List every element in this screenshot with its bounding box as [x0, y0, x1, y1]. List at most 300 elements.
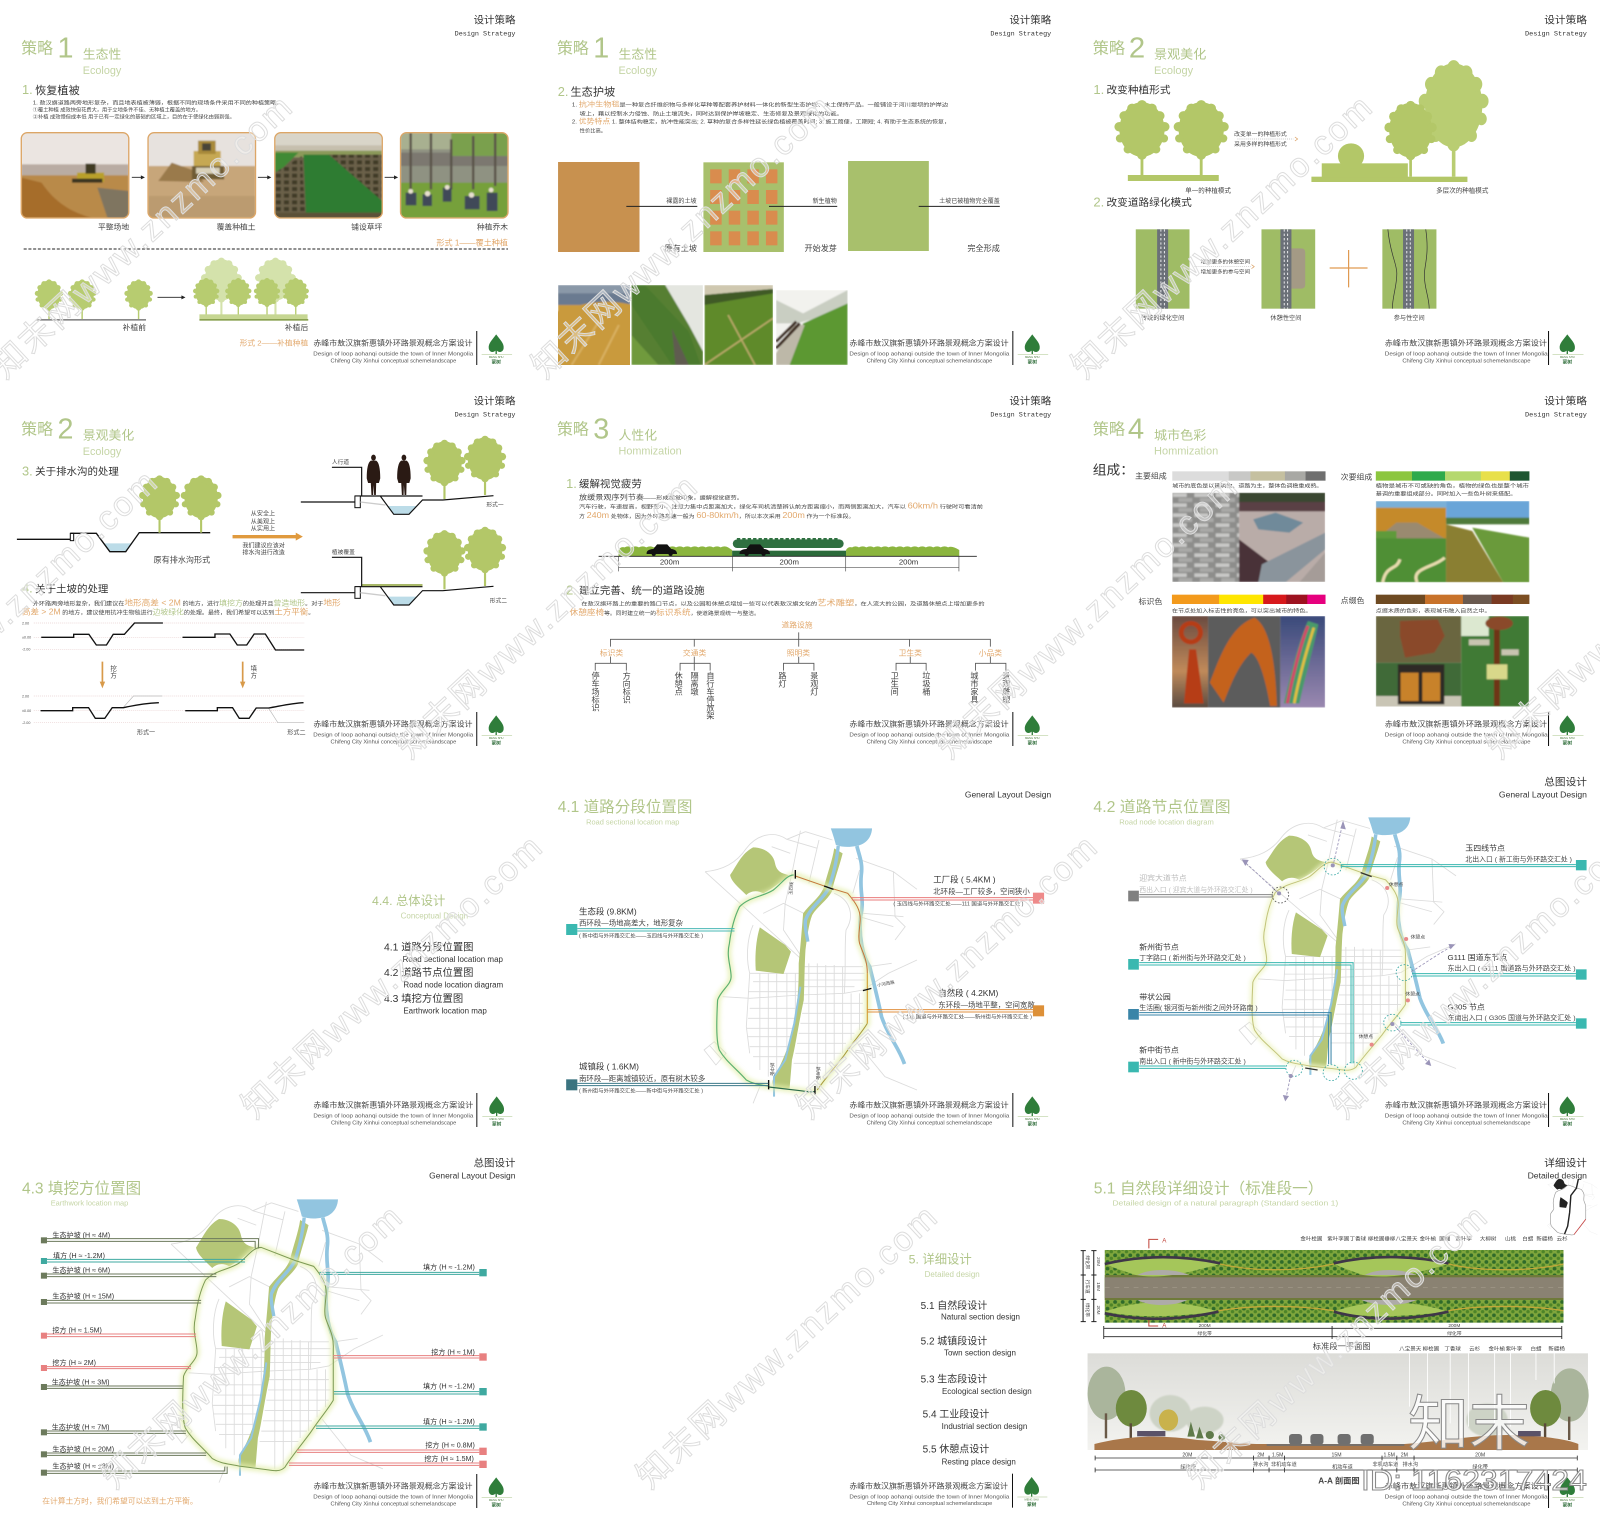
tree diagram: road facilities: 垃圾桶 [922, 671, 931, 697]
panel title [557, 414, 682, 458]
footer: MENG SHU [1025, 736, 1040, 740]
tree diagram: road facilities: 路灯 [778, 671, 787, 689]
section dimensions: 绿化带 [1472, 1464, 1488, 1471]
swatch labels: 开始发芽 [804, 243, 837, 253]
header label: 设计策略 [1009, 395, 1052, 408]
section markers A: A [1162, 1237, 1167, 1244]
map: ring road and nodes: 休憩点 [1359, 1033, 1373, 1040]
footer: Chifeng City Xinhui conceptual schemelandscape [867, 1120, 992, 1126]
tree diagram: road facilities: 照明类 [787, 647, 810, 657]
chart: earthwork profiles before: 2.00 [22, 621, 29, 625]
contents list: Earthwork location map [403, 1006, 487, 1015]
callouts: right nodes [1341, 843, 1587, 1029]
header label: General Layout Design [1499, 789, 1587, 799]
map: ring road segments: 新中街 [769, 1063, 776, 1076]
callouts: right nodes: 玉四线节点 [1465, 843, 1505, 853]
main colours: bar, caption, photo [1135, 470, 1326, 582]
header label: Design Strategy [455, 411, 515, 419]
map: ring road segments: 玉四线 [787, 881, 794, 895]
footer: Design of loop aohanqi outside the town of Inner Mongolia [313, 733, 473, 739]
section markers A [1149, 1237, 1167, 1329]
signage colours: bar, caption, photo: 在节点处加入标志性的亮色，可以突出城市的特色。 [1172, 606, 1311, 614]
callouts: right earthwork items [289, 1262, 487, 1468]
callouts: left earthwork items: 挖方 (H ≈ 2M) [52, 1358, 96, 1367]
footer: 赤峰市敖汉旗新惠镇外环路景观概念方案设计 [849, 1100, 1009, 1110]
callouts: right earthwork items: 挖方 (H ≈ 1.5M) [424, 1454, 474, 1463]
section heading: 恢复植被 [35, 83, 80, 97]
footer: 蒙树 [1027, 1501, 1037, 1508]
footer [1385, 331, 1583, 365]
contents list [384, 940, 504, 1015]
callouts: right nodes: 东南出入口 ( G305 国道与外环路交汇处 ) [1447, 1013, 1576, 1022]
photo: terraced green slope [704, 285, 773, 365]
footer: Design of loop aohanqi outside the town of Inner Mongolia [1385, 1114, 1548, 1120]
callouts: left earthwork items: 挖方 (H ≈ 1.5M) [52, 1326, 102, 1335]
panel title: 策略 [557, 420, 589, 438]
orange arrow with reasons: 我们建议应该对 [242, 541, 285, 549]
footer: MENG SHU [1025, 1117, 1040, 1121]
section heading 4 [22, 581, 109, 596]
road captions: 休憩性空间 [1270, 314, 1301, 322]
plant labels on section: 白蜡 [1530, 1345, 1542, 1353]
horizontal dimensions: 绿化带 [1197, 1330, 1212, 1337]
callouts: left earthwork items: 生态护坡 (H ≈ 7M) [52, 1422, 109, 1431]
plan caption: 标准段一平面图 [1313, 1341, 1371, 1351]
main colours: bar, caption, photo: 城市的底色是以建筑物、道路为主，整体色调稳重成熟。 [1172, 482, 1322, 490]
section dimensions: 2M [1401, 1453, 1408, 1459]
footer: Design of loop aohanqi outside the town of Inner Mongolia [313, 1114, 473, 1120]
footer: Design of loop aohanqi outside the town of Inner Mongolia [1385, 733, 1548, 739]
horizontal dimensions: 绿化带 [1447, 1330, 1462, 1337]
header label: 总图设计 [474, 1157, 515, 1170]
callout: factory section [852, 875, 1044, 908]
callouts: left earthwork items: 填方 (H ≈ -1.2M) [53, 1251, 105, 1260]
plant labels on plan: 大柳树 [1480, 1234, 1497, 1242]
diagram captions [123, 322, 309, 348]
header label: General Layout Design [965, 789, 1052, 799]
header label: Design Strategy [990, 411, 1051, 419]
callouts: left nodes: 新中街节点 [1139, 1044, 1179, 1054]
diagram captions [1185, 185, 1489, 194]
callouts: right earthwork items: 填方 (H ≈ -1.2M) [423, 1382, 475, 1391]
tree diagram: road facilities: 城市家具 [970, 672, 979, 705]
description text: 性价比高。 [580, 126, 606, 134]
intro text [33, 99, 282, 121]
road: traditional greening [1136, 229, 1189, 309]
section dimensions [1095, 1453, 1577, 1472]
section heading 1 [1093, 82, 1171, 97]
panel title: Hommization [1154, 446, 1218, 458]
section dimensions: 非机动车道 [1271, 1461, 1297, 1468]
footer [1385, 1474, 1583, 1508]
horizontal dimensions: 200M [1448, 1323, 1460, 1329]
panel title: Ecology [1154, 65, 1194, 77]
diagram captions: 补植后 [285, 322, 309, 332]
description text [570, 597, 985, 617]
arrow [158, 296, 185, 299]
footer: 赤峰市敖汉旗新惠镇外环路景观概念方案设计 [849, 1480, 1008, 1490]
section dimensions: 排水沟 [1403, 1461, 1418, 1468]
tree diagram: road facilities: 标识类 [600, 647, 623, 657]
plant labels on section: 八宝景天 [1399, 1345, 1422, 1353]
swatch labels: 裸露的土坡 [666, 197, 697, 205]
callouts: left earthwork items: 生态护坡 (H ≈ 3M) [52, 1377, 109, 1386]
description text: 汽车行驶，车速提高，视野变小，注意力集中点距离加大，绿化车司机清楚辨认前方距离缩小，而两侧距离加大，汽车以 60km/h 行驶时可看清前 [579, 502, 984, 511]
diagram captions: 补植前 [123, 322, 146, 332]
arrows: cut and fill: 方 [110, 670, 117, 679]
accent colours: bar, caption, photo: 点缀木质的色彩，表现城市融入自然之中。 [1376, 606, 1491, 614]
swatch labels: 土坡已被植物完全覆盖 [939, 197, 1000, 205]
footer [313, 1474, 512, 1508]
section heading: 2. [558, 84, 568, 99]
footer: Chifeng City Xinhui conceptual schemelandscape [331, 1120, 456, 1126]
description text: 2. 优势特点 1. 整体结构稳定，抗冲性能突出; 2. 草种的复合多样性延长绿色植被覆盖时间; 3. 施工简便，工期短; 4. 有助于生态系统的恢复， [572, 117, 950, 126]
footer: MENG SHU [1025, 355, 1040, 359]
header label: Design Strategy [1525, 30, 1587, 38]
panel: 5.1 natural section detailed design [1081, 1157, 1597, 1508]
plant labels on section: 金叶榆 [1488, 1345, 1506, 1353]
footer: Design of loop aohanqi outside the town of Inner Mongolia [849, 1494, 1009, 1500]
arrows: cut and fill: 挖 [110, 664, 117, 673]
horizontal dimensions: 200M [1199, 1323, 1211, 1329]
section heading 3: 关于排水沟的处理 [35, 465, 119, 478]
contents list: 5.1 自然段设计 [921, 1299, 987, 1312]
footer: MENG SHU [1560, 1117, 1575, 1121]
chart: earthwork profiles before [22, 621, 304, 652]
tree diagram: road facilities: 道路设施 [781, 620, 813, 630]
section caption: A-A 剖面图 [1318, 1475, 1360, 1485]
watermarks: diagonal site marks: 知末网www.znzmo.com [1180, 1199, 1494, 1496]
footer: Design of loop aohanqi outside the town of Inner Mongolia [313, 1495, 473, 1501]
panel title [1094, 1180, 1339, 1207]
chart: earthwork profiles after: ±0.00 [22, 709, 31, 713]
tree diagram: road facilities: 自行车停放架 [706, 671, 715, 721]
contents list: 4.3 填挖方位置图 [384, 992, 463, 1005]
orange arrow with reasons: 从美观上 [251, 517, 275, 525]
panel title [557, 33, 658, 77]
panel title: 生态性 [619, 47, 657, 62]
section dimensions: 1.5M [1272, 1453, 1283, 1459]
contents list: Road sectional location map [403, 955, 504, 964]
callout: natural section: ( 111 国道与外环路交汇处——新州街与外环路交汇处 ) [903, 1013, 1032, 1020]
header label [1499, 776, 1587, 799]
panel: strategy 2 planting and road greening [1093, 14, 1587, 365]
footer: Design of loop aohanqi outside the town of Inner Mongolia [1385, 352, 1548, 358]
header label: Detailed design [1528, 1170, 1587, 1180]
diagram: single planting mode [1114, 100, 1229, 181]
photo: laying turf [275, 133, 382, 218]
road: participatory space [1382, 229, 1436, 309]
header label [990, 14, 1052, 38]
callouts: left earthwork items: 生态护坡 (H ≈ 15M) [52, 1292, 114, 1301]
header label [429, 1157, 516, 1180]
section heading 1: 改变种植形式 [1106, 84, 1171, 97]
callouts: left nodes: 新州街节点 [1139, 941, 1179, 951]
callouts: left nodes [1128, 873, 1353, 1072]
callout: ecological section: 西环段—场地高差大，地形复杂 [579, 919, 684, 928]
description text: 外环路两旁地形复杂，我们建议在地形高差 < 2M 的地方，进行填挖方的处理并且营造地形。对于地形 [33, 597, 341, 607]
footer [313, 1093, 512, 1127]
callout: factory section: 工厂段 ( 5.4KM ) [933, 875, 996, 885]
footer: Chifeng City Xinhui conceptual schemelandscape [1402, 1501, 1530, 1507]
diagram: form one: 人行道 [332, 458, 349, 466]
photo: grading the site [21, 133, 129, 218]
header label: 总图设计 [1544, 776, 1587, 789]
chart: earthwork profiles before: -2.00 [22, 648, 30, 652]
diagram: form two [301, 527, 507, 605]
section heading: 1. [22, 82, 33, 97]
plant labels on plan: 山桃 [1505, 1234, 1517, 1242]
swatch: sprouting [703, 162, 784, 252]
contents list: 5.4 工业段设计 [923, 1407, 989, 1420]
diagram: trees before infill [35, 279, 153, 321]
footer: Design of loop aohanqi outside the town of Inner Mongolia [1385, 1495, 1548, 1501]
photo: green slope with rock [631, 285, 704, 365]
panel: strategy 3 humanisation [557, 395, 1052, 746]
description text: 放缓景观序列节奏 ——形成视觉印象，缓解视觉疲劳。 [579, 492, 743, 501]
watermarks: diagonal site marks: 知末网www.znzmo.com [930, 469, 1244, 766]
watermarks: diagonal site marks: 知末网www.znzmo.com [95, 1199, 409, 1496]
footer: 赤峰市敖汉旗新惠镇外环路景观概念方案设计 [849, 338, 1009, 348]
footer: 蒙树 [1028, 739, 1037, 746]
plant labels on plan: 金叶桧圃 [1300, 1234, 1322, 1242]
panel: section 4 conceptual design contents [313, 894, 512, 1127]
description text [579, 492, 984, 520]
footer: MENG SHU [490, 1117, 504, 1121]
plant labels on section: 丁香球 [1444, 1345, 1461, 1353]
photo: covering planting soil [148, 133, 256, 218]
footer: MENG SHU [1560, 736, 1575, 740]
arrow [258, 176, 270, 179]
callouts: right earthwork items: 挖方 (H ≈ 0.8M) [425, 1440, 475, 1449]
orange arrow with reasons: 从实用上 [251, 525, 275, 533]
header label: 详细设计 [1544, 1157, 1587, 1170]
tree diagram: road facilities: 小品类 [979, 647, 1002, 657]
section heading: 生态护坡 [571, 84, 615, 98]
contents list: Natural section design [941, 1312, 1020, 1321]
footer: Chifeng City Xinhui conceptual schemelandscape [867, 1501, 992, 1507]
chart captions: 形式一 [137, 728, 155, 736]
panel title [22, 1179, 141, 1207]
callout: factory section: ( 玉四线与外环路交汇处——111 国道与外环路交汇处 ) [893, 901, 1024, 908]
vertical dimensions: 行车道 [1084, 1280, 1091, 1294]
map: ring road earthwork [170, 1199, 383, 1483]
orange arrow with reasons: 从安全上 [251, 510, 275, 518]
watermarks: diagonal site marks: 知末网www.znzmo.com [790, 829, 1104, 1126]
section heading 2 [1093, 195, 1192, 210]
panel title: 人性化 [619, 428, 657, 443]
description text [22, 597, 341, 617]
panel: strategy 1 slope protection [556, 14, 1052, 367]
description text [572, 100, 950, 134]
panel title: 3 [593, 414, 609, 445]
arrows: cut and fill: 方 [251, 670, 257, 679]
tree diagram: road facilities: 隔离墩 [691, 672, 699, 697]
header label: 设计策略 [1544, 14, 1587, 27]
section heading 2 [566, 583, 705, 598]
callout: town section: 城镇段 ( 1.6KM) [579, 1062, 639, 1072]
callouts: left nodes: 迎宾大道节点 [1139, 873, 1187, 883]
callouts: left earthwork items: 生态护坡 (H ≈ 4M) [52, 1231, 110, 1240]
plant labels on plan: 八宝景天 [1395, 1234, 1418, 1242]
callouts: right earthwork items: 挖方 (H ≈ 1M) [431, 1347, 475, 1356]
callouts: left earthwork items: 生态护坡 (H ≈ 6M) [52, 1265, 110, 1274]
callouts: left nodes: 西出入口 ( 迎宾大道与外环路交汇处 ) [1139, 885, 1253, 894]
section heading 2: 2. [1093, 195, 1104, 210]
composition heading: 组成： [1093, 463, 1134, 477]
section heading 2: 2. [566, 583, 577, 598]
footer: 赤峰市敖汉旗新惠镇外环路景观概念方案设计 [849, 719, 1009, 729]
footer: 蒙树 [491, 739, 501, 746]
arrow text [1194, 258, 1254, 276]
section dimensions: 1.5M [1384, 1453, 1395, 1459]
panel title: 策略 [21, 39, 53, 57]
note text: 在计算土方时，我们希望可以达到土方平衡。 [42, 1495, 198, 1505]
panel title [1093, 414, 1218, 458]
road captions [1141, 314, 1425, 322]
panel title: 景观美化 [1154, 47, 1206, 62]
panel title: Detailed design of a natural paragraph (Standard section 1) [1112, 1198, 1339, 1207]
footer: 蒙树 [1028, 1120, 1037, 1127]
watermarks: diagonal site marks: 知末网www.znzmo.com [630, 1199, 944, 1496]
callouts: right nodes: G305 节点 [1447, 1002, 1485, 1011]
accent colours: bar, caption, photo [1341, 595, 1529, 707]
callouts: left nodes: 生活圈( 银河街与新州街之间外环路南 ) [1139, 1003, 1258, 1012]
road captions: 传统的绿化空间 [1141, 314, 1184, 322]
map: ring road and nodes: 休憩点 [1411, 934, 1425, 941]
map: ring road and nodes: 休憩点 [1389, 881, 1404, 888]
section heading 4: 4. [22, 581, 33, 596]
intro text: ①覆土种植 成效快但花费大，用于立地条件不佳、无种植土覆盖的地方。 [33, 106, 201, 113]
footer: 赤峰市敖汉旗新惠镇外环路景观概念方案设计 [313, 338, 473, 348]
swatch labels: 完全形成 [967, 243, 1000, 253]
tree diagram: road facilities: 景观雕塑 [1002, 672, 1010, 705]
section dimensions: 2M [1257, 1453, 1264, 1459]
footer: 赤峰市敖汉旗新惠镇外环路景观概念方案设计 [313, 1481, 473, 1491]
section dimensions: 绿化带 [1180, 1464, 1196, 1471]
swatch: bare soil [558, 162, 640, 252]
arrow text [1234, 130, 1298, 148]
main colours: bar, caption, photo: 主要组成 [1135, 470, 1167, 480]
tree diagram: road facilities: 停车场标识 [592, 671, 600, 713]
form 1 label: 形式 1——覆土种植 [436, 237, 508, 247]
header label [1525, 395, 1587, 419]
panel title: 策略 [1093, 421, 1125, 438]
footer: MENG SHU [489, 355, 504, 359]
panel title: 1 [593, 33, 609, 64]
callout: ecological section: ( 新中街与外环路交汇处——玉四线与外环路交汇处 ) [579, 933, 703, 940]
diagram: 200m planting rhythm [599, 539, 977, 571]
footer: 蒙树 [1562, 1501, 1572, 1508]
header label: Design Strategy [1525, 411, 1587, 419]
section heading 3: 3. [22, 463, 33, 478]
map: ring road segments: 新州街 [815, 1067, 822, 1080]
panel: strategy 2 drainage and earth slopes [17, 395, 516, 746]
footer: MENG SHU [489, 736, 504, 740]
arrow text: 增加更多的参与空间 [1201, 268, 1250, 276]
signage colours: bar, caption, photo: 标识色 [1139, 596, 1162, 606]
panel title: 1 [57, 33, 73, 64]
callout: ecological section [566, 906, 734, 940]
footer: Chifeng City Xinhui conceptual schemelandscape [867, 739, 992, 745]
panel title: Ecology [83, 65, 122, 77]
chart: earthwork profiles after: -2.00 [22, 721, 30, 725]
footer: Chifeng City Xinhui conceptual schemelandscape [867, 358, 992, 364]
plant labels on plan: 金叶榆 [1420, 1234, 1437, 1242]
section title: 4.4. 总体设计 [372, 894, 445, 908]
callouts: right earthwork items: 填方 (H ≈ -1.2M) [423, 1417, 475, 1426]
section heading [22, 82, 80, 97]
swatch labels: 新生植物 [813, 197, 837, 205]
section dimensions: 20M [1475, 1453, 1485, 1459]
watermark: large site logo and ID: ID: 1162317424 [1361, 1465, 1587, 1497]
callouts: left nodes: 南出入口 ( 新中街与外环路交汇处 ) [1139, 1056, 1246, 1065]
section title: 5. 详细设计 [909, 1251, 972, 1266]
key map [1547, 1175, 1597, 1238]
callouts: left earthwork items [41, 1231, 259, 1476]
watermark: large site logo and ID [1361, 1391, 1587, 1497]
vertical dimensions: 绿化带 [1084, 1255, 1091, 1270]
panel title: 4 [1128, 414, 1144, 445]
header label: Design Strategy [455, 30, 515, 38]
vertical dimensions: 20M [1095, 1257, 1101, 1266]
callouts: left nodes: 带状公园 [1139, 991, 1171, 1001]
footer [849, 331, 1048, 365]
footer [849, 1093, 1048, 1127]
callouts: left nodes: 丁字路口 ( 新州街与外环路交汇处 ) [1139, 953, 1246, 962]
section heading 1: 1. [1093, 82, 1104, 97]
tree diagram: road facilities: 休憩点 [675, 671, 683, 697]
accent colours: bar, caption, photo: 点缀色 [1341, 595, 1365, 605]
panel: 4.3 earthwork location map [22, 1157, 516, 1508]
callout: town section: 南环段—距离城镇较近，原有树木较多 [579, 1074, 705, 1083]
panel title: 4.3 填挖方位置图 [22, 1179, 141, 1197]
footer: 蒙树 [492, 1120, 502, 1127]
plant labels on section: 云杉 [1469, 1345, 1481, 1353]
panel title [1093, 798, 1231, 826]
plus sign [1330, 250, 1368, 287]
callout: town section [566, 1062, 768, 1095]
footer: MENG SHU [489, 1498, 504, 1502]
panel title: 2 [1129, 33, 1145, 64]
chart captions: 形式二 [287, 728, 306, 736]
panel title [21, 414, 134, 458]
footer: Chifeng City Xinhui conceptual schemelandscape [331, 358, 456, 364]
diagram: 200m planting rhythm: 200m [780, 558, 799, 567]
plant labels on plan: 丁香球 [1350, 1234, 1367, 1242]
header label [1528, 1157, 1587, 1180]
contents list: 4.2 道路节点位置图 [384, 966, 474, 979]
tree diagram: road facilities: 卫生类 [899, 647, 922, 657]
watermarks: diagonal site marks: 知末网www.znzmo.com [390, 469, 704, 766]
arrow text: 采用多样的种植形式 [1234, 140, 1287, 148]
section dimensions: 20M [1182, 1453, 1192, 1459]
footer: 赤峰市敖汉旗新惠镇外环路景观概念方案设计 [313, 719, 473, 729]
contents list: Resting place design [942, 1457, 1016, 1466]
footer: 蒙树 [1562, 358, 1572, 365]
footer: MENG SHU [1560, 355, 1575, 359]
diagram: trees after infill [193, 258, 309, 321]
signage colours: bar, caption, photo [1139, 595, 1326, 708]
arrow [385, 176, 397, 179]
intro text: 1. 敖汉旗道路两旁地形复杂，而且地表植被薄弱，根据不同的现场条件采用不同的种植策略。 [33, 99, 282, 106]
footer [313, 712, 512, 746]
map: ring road segments: 小河西路 [877, 979, 896, 989]
description text: 在敖汉旗环路上的重要的路口节点，以及公园和休憩点增加一些可以代表敖汉旗文化的 艺术雕塑 ，在人流大的公园，及道路休憩点上增加更多的 [581, 597, 985, 607]
panel title [21, 33, 122, 77]
diagram: original ditch [17, 475, 222, 552]
footer: MENG SHU [1025, 1498, 1039, 1502]
